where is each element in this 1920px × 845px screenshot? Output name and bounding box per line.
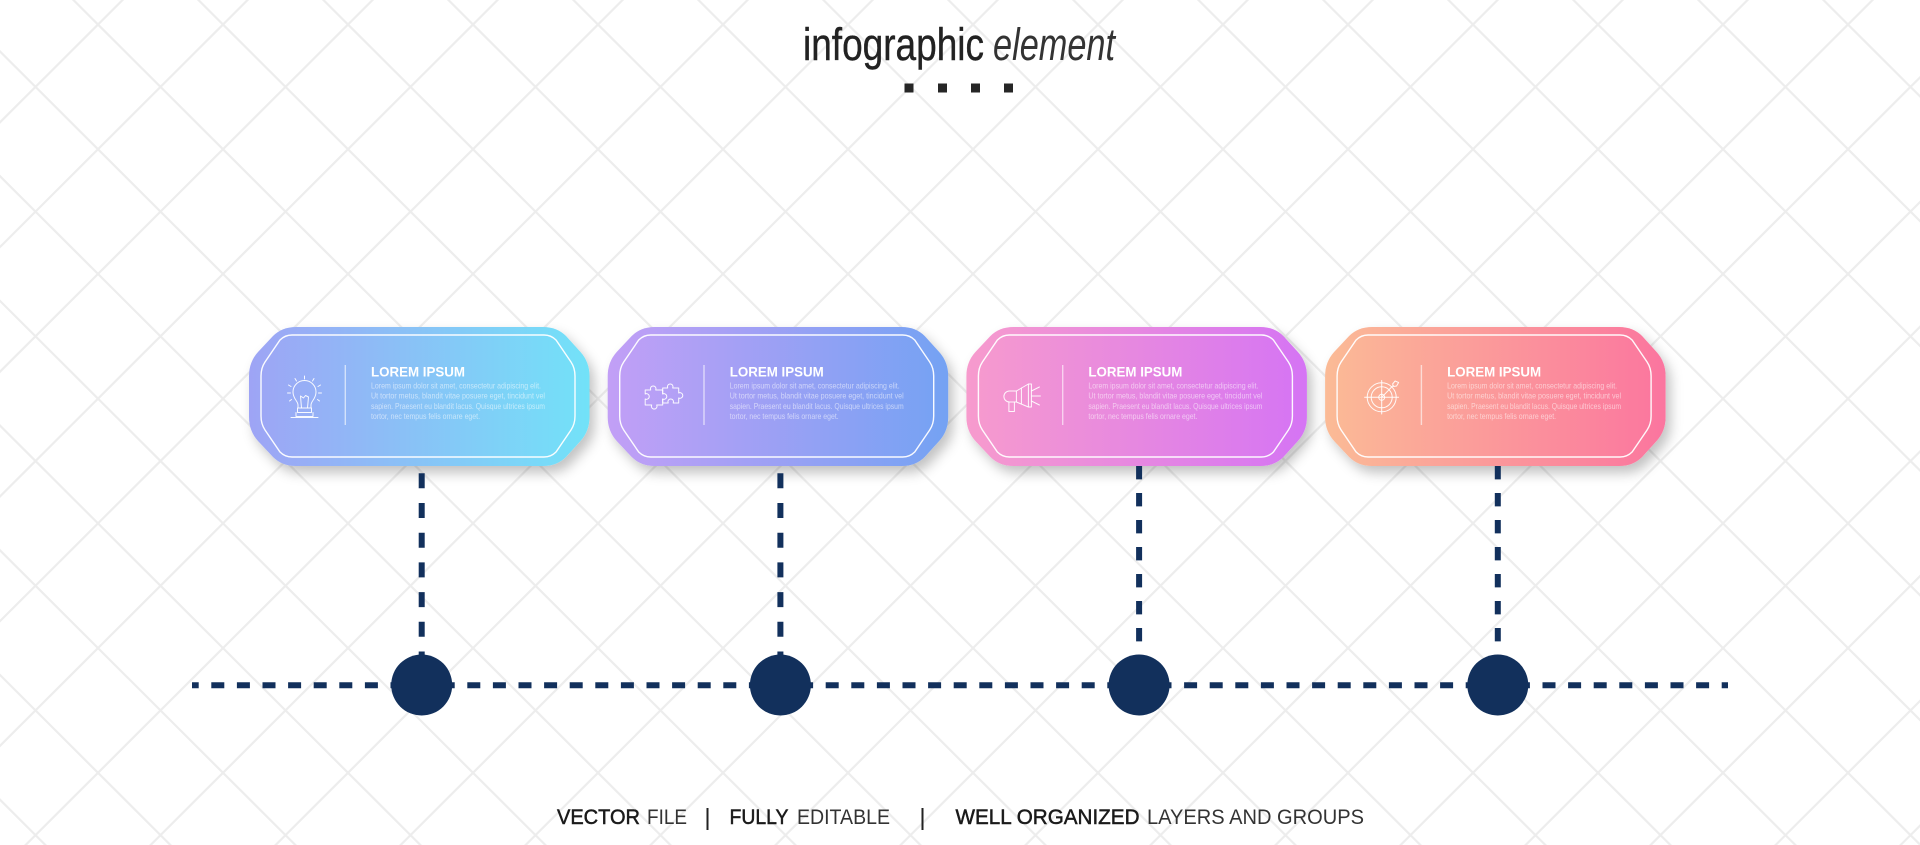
connector 1 [419,473,425,670]
card 4 body text [1447,380,1621,421]
card 4 body text: Lorem ipsum dolor sit amet, consectetur adipiscing elit. [1447,380,1617,390]
card 2 body text: Ut tortor metus, blandit vitae posuere eget, tincidunt vel [730,391,904,401]
card 3 body text: sapien. Praesent eu blandit lacus. Quisque ultrices ipsum [1088,401,1262,411]
card 1 heading: LOREM IPSUM [371,364,465,380]
icon: puzzle [645,384,683,409]
card 4 body text: tortor, nec tempus felis ornare eget. [1447,411,1556,421]
title dots [904,84,1013,92]
card 3 heading: LOREM IPSUM [1088,364,1182,380]
connector 2 [777,473,783,670]
card 2 heading: LOREM IPSUM [730,364,824,380]
connector 3 [1136,466,1142,670]
timeline dashed line [192,682,1728,688]
footer text: FILE [647,806,687,829]
footer text: LAYERS AND GROUPS [1147,806,1364,829]
card 3 body text: Lorem ipsum dolor sit amet, consectetur adipiscing elit. [1088,380,1258,390]
card 2 body text: sapien. Praesent eu blandit lacus. Quisque ultrices ipsum [730,401,904,411]
card 4: target [1325,327,1666,466]
connector 4 [1495,466,1501,670]
card 3 body text [1088,380,1262,421]
footer text [557,806,1364,830]
card 2: puzzle [608,327,948,466]
card 1 body text: Ut tortor metus, blandit vitae posuere eget, tincidunt vel [371,391,545,401]
card 3 body text: Ut tortor metus, blandit vitae posuere eget, tincidunt vel [1088,391,1262,401]
card 4 heading: LOREM IPSUM [1447,364,1541,380]
footer text: WELL ORGANIZED [956,806,1140,829]
card 1 body text: Lorem ipsum dolor sit amet, consectetur adipiscing elit. [371,380,541,390]
footer text: VECTOR [557,806,640,829]
title: element [993,19,1117,70]
icon: megaphone [1004,384,1040,412]
icon: light bulb [288,376,322,418]
card 2 body text: Lorem ipsum dolor sit amet, consectetur adipiscing elit. [730,380,900,390]
card 3: megaphone [966,327,1307,466]
card 3 body text: tortor, nec tempus felis ornare eget. [1088,411,1197,421]
card 1: idea [249,327,590,466]
card 4 body text: sapien. Praesent eu blandit lacus. Quisque ultrices ipsum [1447,401,1621,411]
footer text: EDITABLE [797,806,890,829]
timeline node 2 [750,654,811,716]
footer text: FULLY [730,806,788,829]
card 1 body text: sapien. Praesent eu blandit lacus. Quisque ultrices ipsum [371,401,545,411]
timeline node 3 [1109,654,1170,716]
timeline node 1 [391,654,452,716]
icon: target [1365,380,1399,414]
title: infographic [803,19,984,70]
card 1 body text: tortor, nec tempus felis ornare eget. [371,411,480,421]
card 1 body text [371,380,545,421]
card 2 body text: tortor, nec tempus felis ornare eget. [730,411,839,421]
card 2 body text [730,380,904,421]
timeline node 4 [1467,654,1528,716]
card 4 body text: Ut tortor metus, blandit vitae posuere eget, tincidunt vel [1447,391,1621,401]
